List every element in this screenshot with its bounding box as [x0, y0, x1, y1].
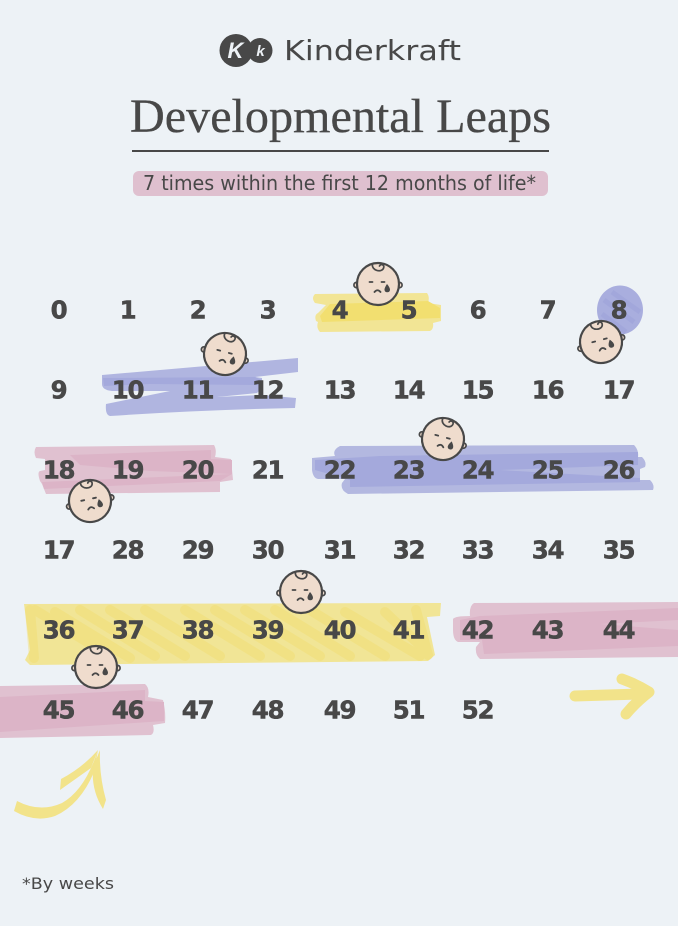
logo mark — [220, 34, 272, 67]
icon: baby week 11 — [196, 327, 254, 381]
row 4: 31 — [324, 536, 355, 564]
row 1: 6 — [470, 296, 486, 324]
row 1: 4 — [332, 296, 348, 324]
icon: baby week 45-46 — [72, 646, 120, 688]
row 2: 16 — [532, 376, 563, 404]
icon: baby week 39 — [277, 571, 325, 613]
row 2: 13 — [324, 376, 355, 404]
row 6: 51 — [393, 696, 424, 724]
row 2: 12 — [252, 376, 283, 404]
row 2: 9 — [51, 376, 67, 404]
scribble: purple week 8 — [597, 286, 643, 334]
footnote: *By weeks — [22, 874, 114, 893]
row 3 — [43, 456, 634, 484]
row 3: 20 — [182, 456, 213, 484]
scribble: purple weeks 22-26 — [312, 445, 654, 494]
row 3: 21 — [252, 456, 283, 484]
row 4: 35 — [603, 536, 634, 564]
arrow: right — [575, 679, 649, 714]
row 5: 36 — [43, 616, 74, 644]
icon: baby week 8 — [572, 315, 630, 369]
subtitle: 7 times within the first 12 months of life* — [143, 171, 536, 195]
row 6: 46 — [112, 696, 143, 724]
row 1: 3 — [260, 296, 276, 324]
row 1: 5 — [401, 296, 417, 324]
row 2: 14 — [393, 376, 424, 404]
logo mark: k — [256, 43, 265, 60]
row 3: 19 — [112, 456, 143, 484]
row 1: 7 — [540, 296, 556, 324]
title underline — [132, 150, 549, 152]
row 3: 24 — [462, 456, 493, 484]
row 4: 33 — [462, 536, 493, 564]
row 6: 49 — [324, 696, 355, 724]
row 1: 0 — [51, 296, 67, 324]
arrow: curved up — [14, 750, 106, 819]
row 6: 45 — [43, 696, 74, 724]
row 5: 43 — [532, 616, 563, 644]
title: Developmental Leaps — [130, 90, 551, 143]
row 3: 26 — [603, 456, 634, 484]
row 3: 22 — [324, 456, 355, 484]
icon: baby week 4-5 — [354, 263, 402, 305]
row 4 — [43, 536, 634, 564]
scribble: yellow weeks 36-41 — [24, 603, 441, 665]
row 3: 18 — [43, 456, 74, 484]
row 2: 11 — [182, 376, 213, 404]
row 5: 38 — [182, 616, 213, 644]
row 4: 34 — [532, 536, 563, 564]
row 1: 8 — [611, 296, 627, 324]
row 5: 41 — [393, 616, 424, 644]
row 6: 48 — [252, 696, 283, 724]
row 2: 17 — [603, 376, 634, 404]
row 1: 1 — [120, 296, 136, 324]
scribble: pink weeks 45-46 — [0, 684, 165, 738]
row 5: 40 — [324, 616, 355, 644]
row 4: 30 — [252, 536, 283, 564]
scribble: yellow weeks 4-5 — [313, 293, 441, 332]
row 2: 15 — [462, 376, 493, 404]
scribble: purple weeks 10-12 — [102, 358, 298, 416]
row 5 — [43, 616, 634, 644]
row 1 — [51, 296, 627, 324]
row 6: 52 — [462, 696, 493, 724]
row 4: 17 — [43, 536, 74, 564]
scribble: pink weeks 42-44 — [453, 602, 678, 659]
row 2: 10 — [112, 376, 143, 404]
row 6 — [43, 696, 493, 724]
row 2 — [51, 376, 634, 404]
row 4: 29 — [182, 536, 213, 564]
logo — [220, 34, 461, 67]
logo mark: K — [228, 38, 246, 63]
row 6: 47 — [182, 696, 213, 724]
icon: baby week 18-19 — [62, 475, 118, 527]
week numbers — [43, 296, 634, 724]
logo wordmark: Kinderkraft — [284, 34, 461, 67]
row 1: 2 — [190, 296, 205, 324]
scribble: pink weeks 18-20 — [34, 445, 233, 494]
row 4: 32 — [393, 536, 424, 564]
row 5: 44 — [603, 616, 634, 644]
icon: baby week 23 — [414, 412, 472, 466]
row 3: 25 — [532, 456, 563, 484]
row 5: 37 — [112, 616, 143, 644]
row 3: 23 — [393, 456, 424, 484]
row 5: 39 — [252, 616, 283, 644]
row 5: 42 — [462, 616, 493, 644]
row 4: 28 — [112, 536, 143, 564]
